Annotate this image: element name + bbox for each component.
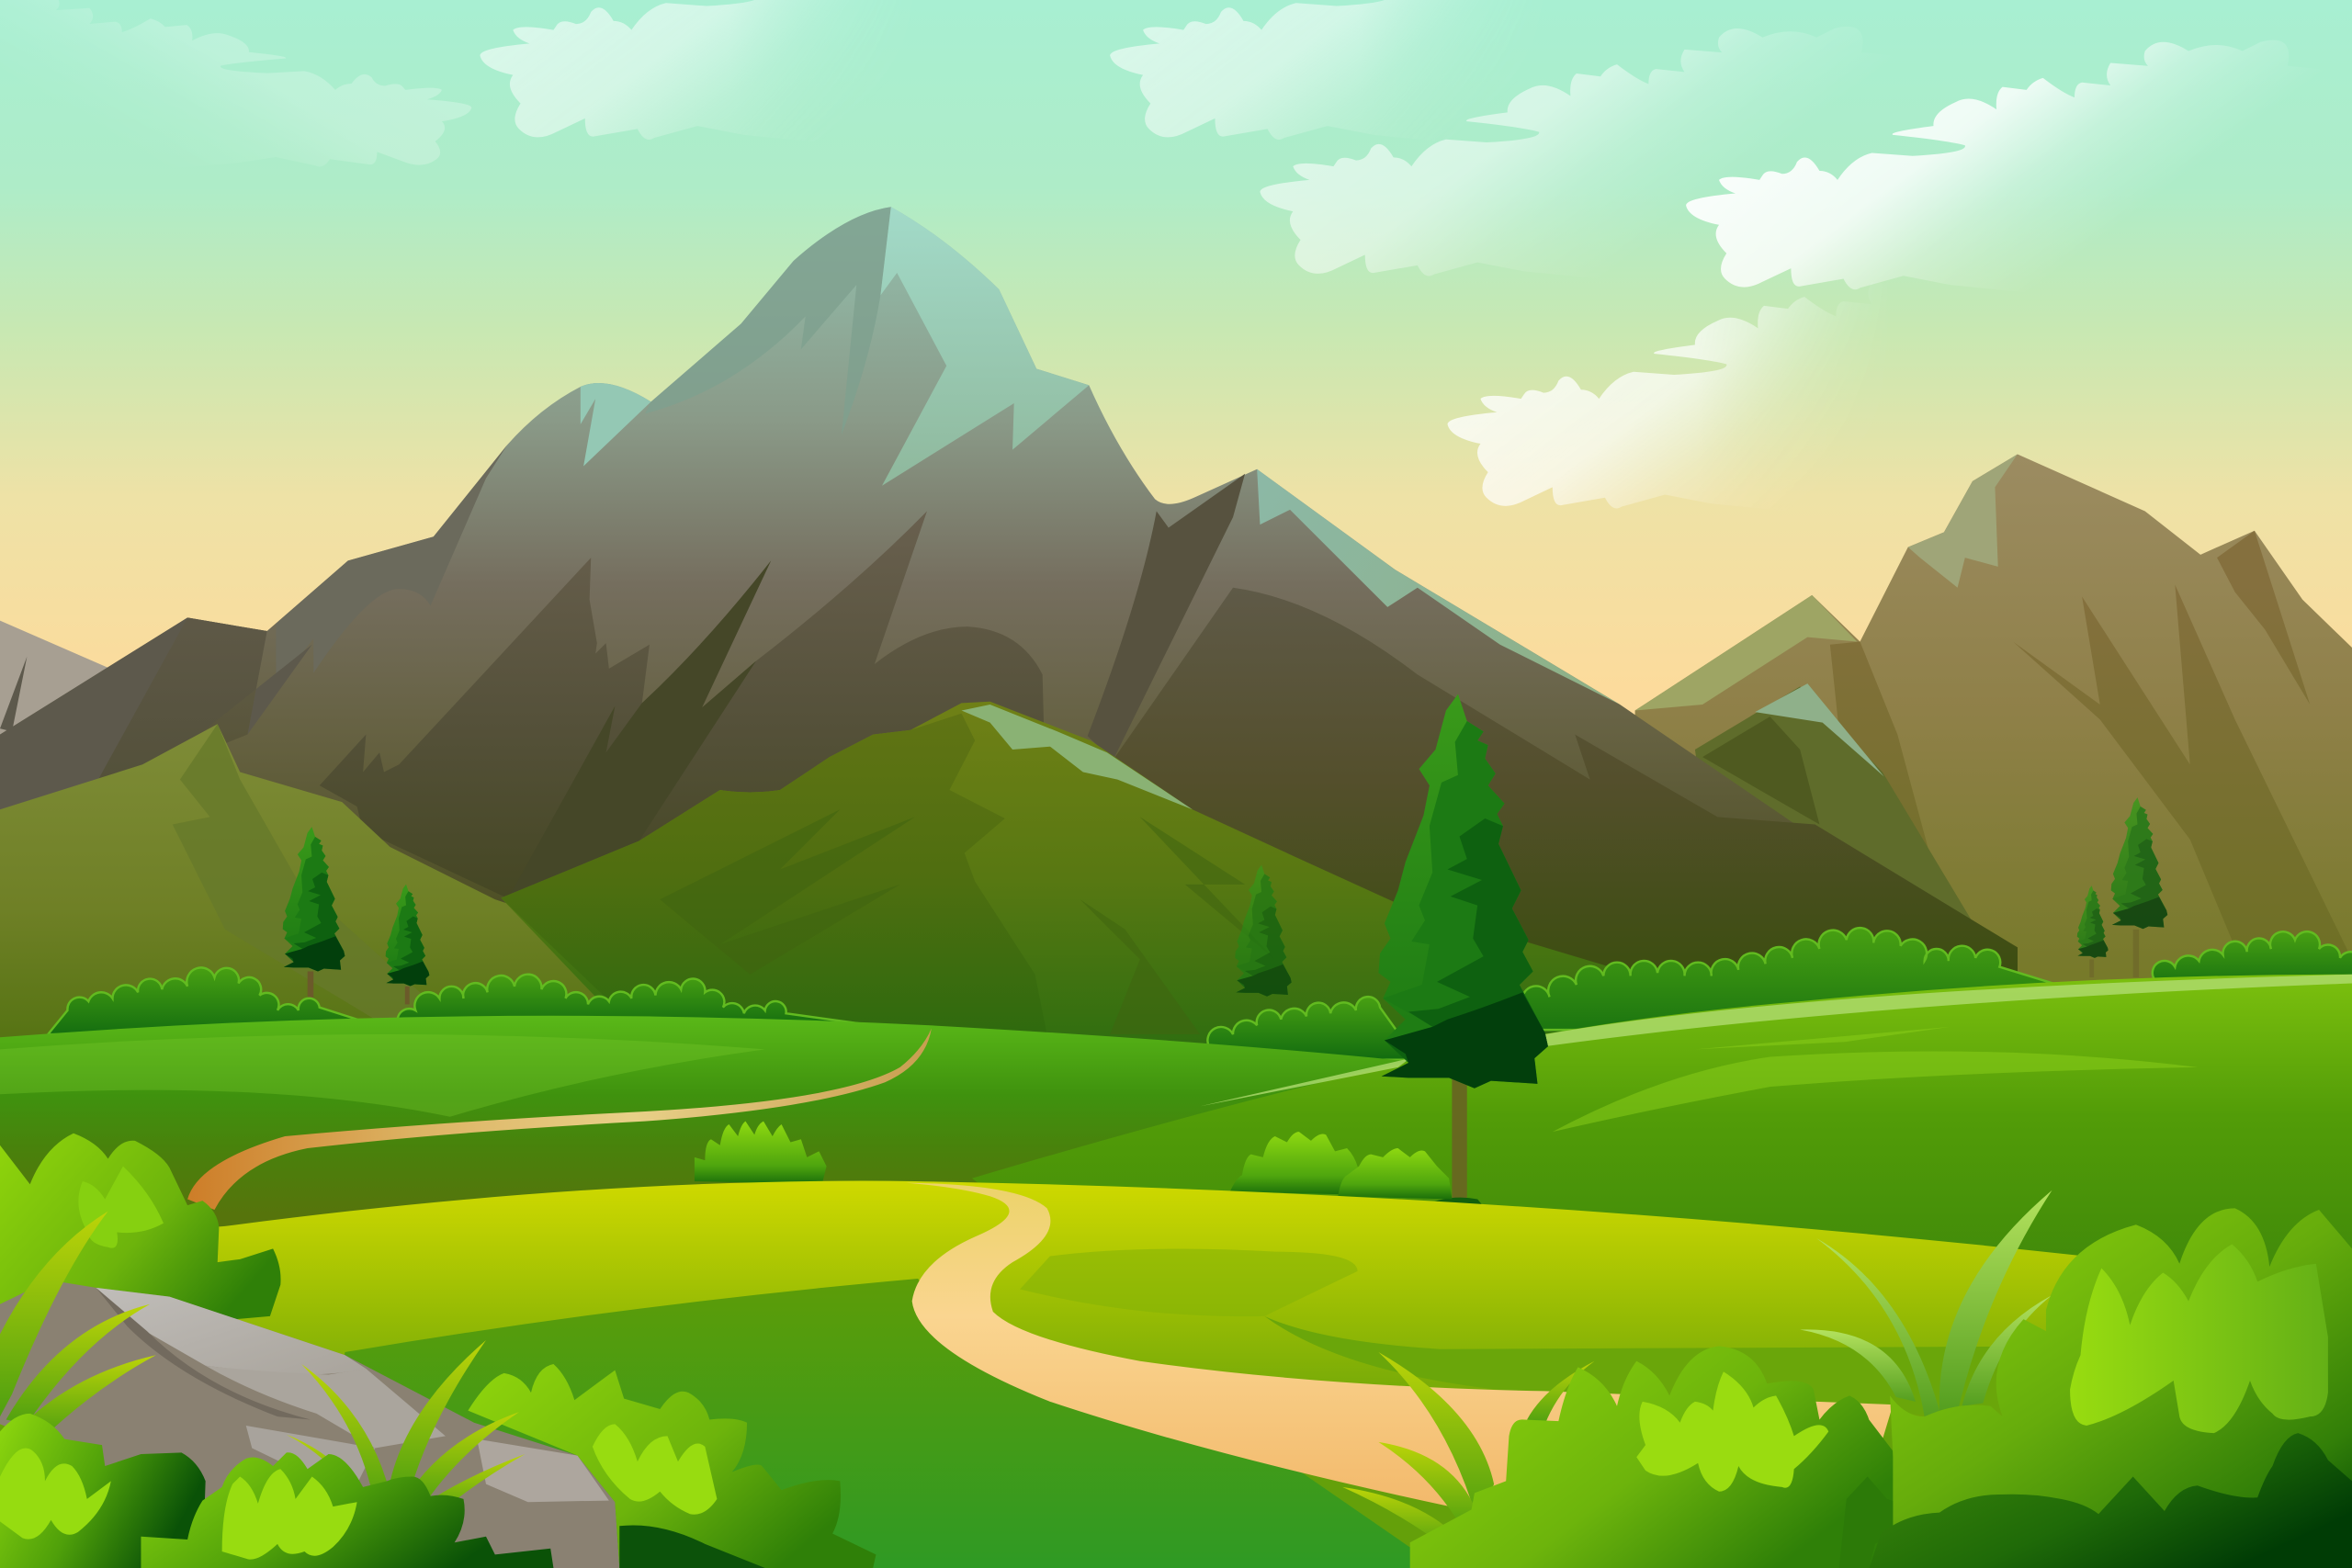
rock: middle face [206, 1366, 446, 1448]
meadow: right lower fold [1264, 1316, 2100, 1424]
snow cap: main peak [880, 207, 1089, 486]
tree: right 1 [2077, 886, 2109, 977]
bushes: centre horizon row [1207, 997, 1418, 1060]
bush: bottom left centre [468, 1364, 876, 1568]
shaded face: right ridge [1110, 588, 2018, 1020]
hill: moss ridge [962, 705, 1193, 809]
shaded face: right ridge cut [1088, 474, 1245, 760]
rock shadows [1830, 531, 2352, 1020]
meadow: upper fold [1020, 1249, 1358, 1316]
shaded face: right notch [1702, 716, 1819, 825]
grass: blade behind centre bush [1527, 1361, 1595, 1424]
grass: left blades [0, 1212, 156, 1436]
tree: faded centre [1235, 865, 1292, 997]
path: far winding trail [187, 1029, 932, 1210]
cloud: upper right [1686, 40, 2352, 299]
grass: right tall blades [1800, 1190, 2052, 1416]
meadow: front hill [0, 1181, 2352, 1568]
mountain: far right brown range [1635, 454, 2352, 1020]
meadow: light sweep [0, 1034, 765, 1117]
snow cap: left peak [581, 383, 651, 467]
path: main foreground trail [906, 1183, 1893, 1517]
hill: centre green [501, 702, 1650, 1065]
rock [0, 1280, 619, 1568]
crown [1378, 694, 1548, 1089]
trees: right group [2077, 797, 2167, 977]
hill: left highlights [173, 724, 450, 1020]
ridge highlight [1755, 683, 1884, 776]
hill: darker left flank [501, 714, 1050, 1049]
rock: crease [96, 1288, 311, 1419]
rock: small face [246, 1426, 375, 1496]
cloud: top centre [1110, 0, 1468, 140]
tree: left 1 [283, 827, 345, 998]
bush: bottom foreground centre left [141, 1452, 553, 1568]
bush: light lobes [1636, 1371, 1828, 1492]
hill: right meadow [0, 928, 2352, 1349]
bushes: centre left horizon row [398, 975, 894, 1029]
cloud: lower right [1448, 297, 1846, 509]
meadow: highlight rim [1200, 975, 2352, 1106]
bush: dark base [619, 1525, 765, 1568]
meadow: lower left shade [300, 1279, 1440, 1568]
bushes: meadow back [0, 1016, 1500, 1245]
bush: dark base [1869, 1433, 2352, 1568]
mountain: main massif [0, 207, 2018, 1020]
light ridge [1635, 595, 1857, 711]
bushes: small mid meadow tuft [695, 1122, 827, 1184]
rock: right face [477, 1439, 609, 1502]
cloud: middle [1260, 27, 1926, 287]
mountain: small peak behind the main ridge [1695, 686, 1995, 959]
upper left shaded face [645, 207, 891, 434]
tree: large foreground pine [1378, 694, 1548, 1208]
meadow: right main [972, 975, 2352, 1349]
shaded face: far left [0, 617, 312, 840]
bush: light lobes [2070, 1245, 2328, 1433]
cloud: top centre left [480, 0, 838, 140]
shaded face: left lower [90, 617, 267, 840]
trunk [1452, 1072, 1467, 1203]
bushes: far right row [2153, 931, 2352, 994]
bush: bottom left corner [0, 1414, 206, 1568]
shaded face: central [320, 511, 1044, 899]
bushes: left horizon row [48, 967, 357, 1037]
tree: left 2 [386, 885, 429, 1004]
tree: right 2 [2111, 797, 2167, 977]
rock: light top face [96, 1288, 366, 1375]
mountain: far left grey [0, 621, 117, 787]
bush: right large foreground [1869, 1208, 2352, 1568]
bush: light lobes [78, 1167, 164, 1248]
meadow: light streaks [1553, 1027, 2198, 1132]
grass: centre bottom blades [1342, 1352, 1494, 1550]
hill: left green [0, 724, 780, 1049]
trees: small group left [283, 827, 429, 1004]
bush: bottom centre foreground [1410, 1346, 1935, 1568]
clouds [0, 0, 2352, 519]
hill: grass strokes [660, 809, 1275, 1034]
shaded face: darkest gully [510, 560, 771, 895]
bush: dark crease [1839, 1476, 1935, 1568]
bush: light lobes [222, 1469, 357, 1560]
shaded face: left shoulder [276, 446, 507, 686]
bush: light lobes [0, 1449, 111, 1540]
snow cap: right ridge [1257, 469, 1620, 705]
trunk base shadow [1418, 1198, 1485, 1208]
bush: left mid foreground [0, 1134, 281, 1326]
grass: rock blades [287, 1340, 525, 1517]
bush: light lobes [593, 1424, 717, 1515]
bushes: right mid meadow tufts [1230, 1132, 1452, 1200]
bushes: right long horizon row [1522, 928, 2082, 1053]
cloud: top left faint [0, 0, 471, 174]
